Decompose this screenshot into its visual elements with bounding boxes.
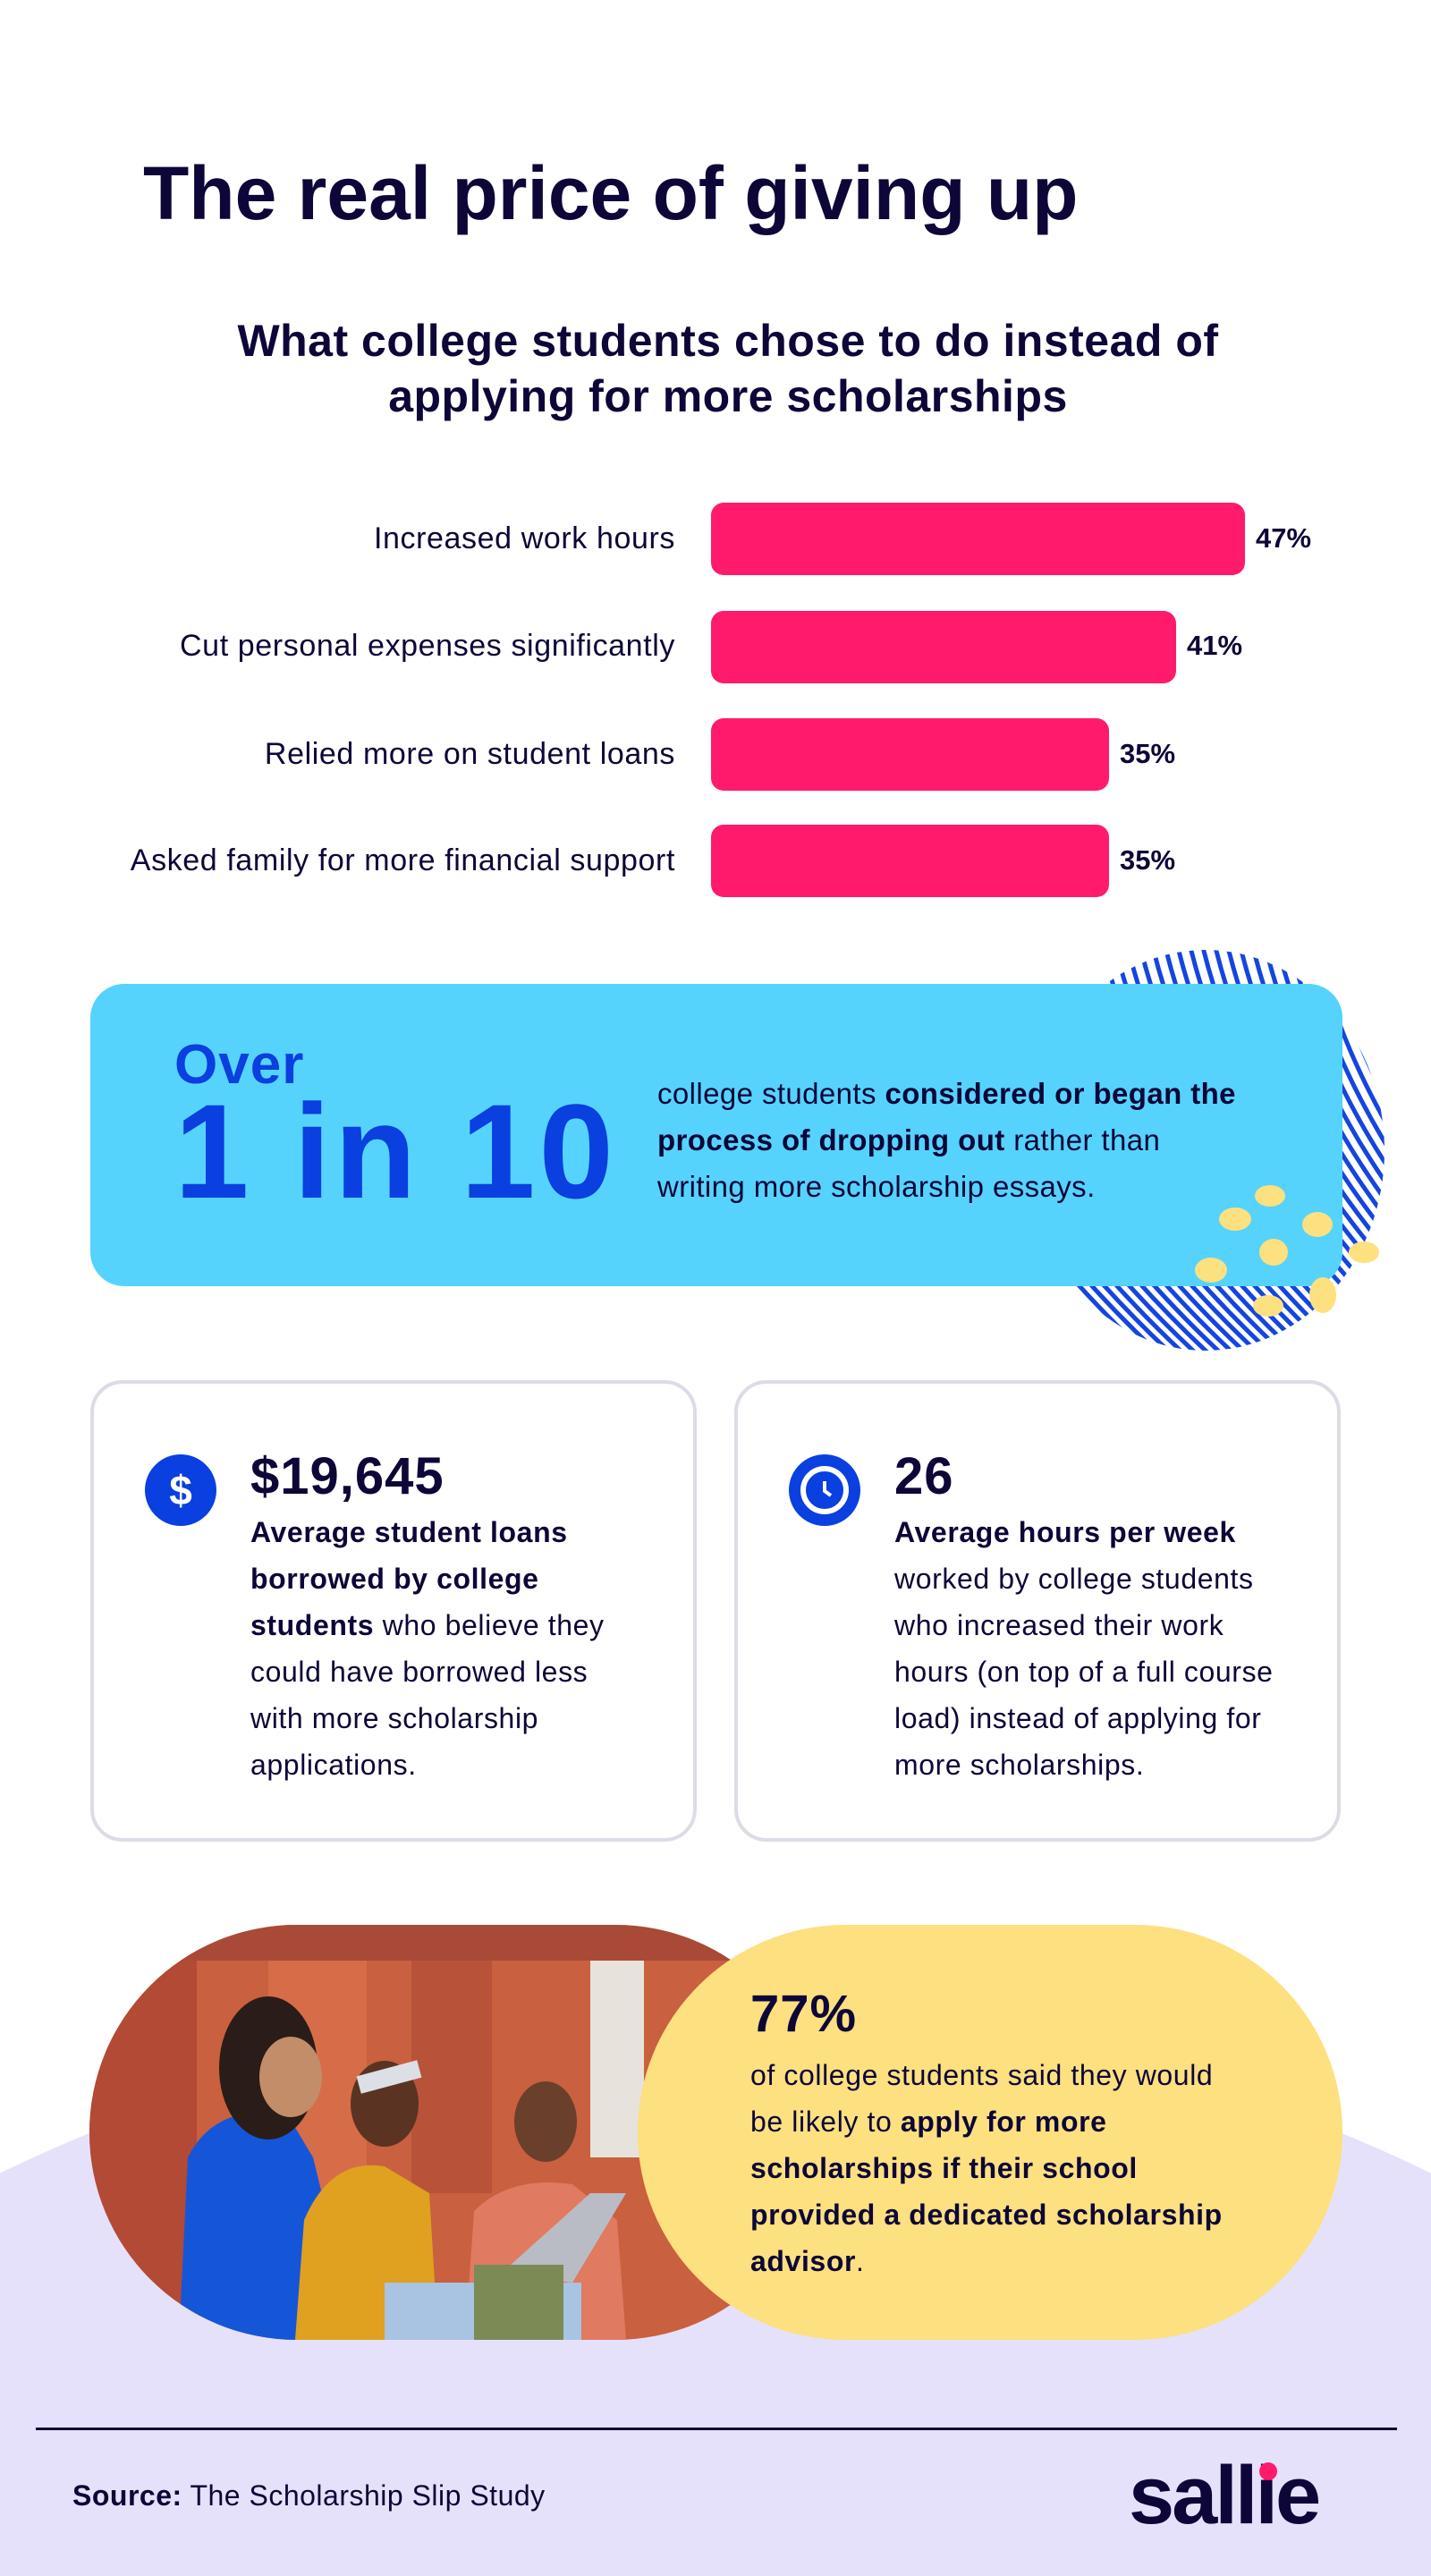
footer divider [36, 2428, 1397, 2430]
stat text: more scholarships. [894, 1749, 1144, 1781]
logo: sallie: sallie [1129, 2450, 1318, 2541]
stat text: who increased their work [894, 1609, 1224, 1641]
stat text: advisor. [750, 2245, 865, 2277]
stat text: hours (on top of a full course [894, 1656, 1274, 1688]
stat text: students who believe they [250, 1609, 605, 1641]
callout text: writing more scholarship essays. [657, 1170, 1096, 1203]
stat text: load) instead of applying for [894, 1702, 1262, 1734]
bar: family support [131, 825, 1175, 897]
callout text: process of dropping out rather than [657, 1123, 1160, 1157]
source: Source: The Scholarship Slip Study [72, 2479, 546, 2512]
card: average hours worked [734, 1380, 1341, 1842]
callout text [657, 1077, 1236, 1203]
stat text [250, 1516, 605, 1781]
stat text: borrowed by college [250, 1563, 539, 1595]
bar: increased work hours [374, 503, 1311, 575]
stat number: $19,645 [250, 1447, 445, 1505]
big stat: Over [174, 1034, 304, 1096]
stat text: with more scholarship [250, 1702, 538, 1734]
bar chart: Cut personal expenses significantly [180, 629, 675, 663]
blue sweater figure [181, 2116, 321, 2340]
stat text: Average student loans [250, 1516, 568, 1548]
bar: cut expenses [180, 611, 1242, 683]
decoration: yellow dabs [1195, 1185, 1379, 1317]
stat text: applications. [250, 1749, 417, 1781]
big stat: 1 in 10 [174, 1076, 617, 1226]
chart subtitle: applying for more scholarships [388, 371, 1068, 421]
callout: 77% scholarship advisor [638, 1925, 1342, 2340]
laptop [501, 2193, 626, 2283]
yellow sweater figure [295, 2165, 438, 2340]
salmon shirt figure [465, 2182, 626, 2340]
bar chart: Asked family for more financial support [131, 843, 675, 877]
bar chart: 35% [1120, 844, 1175, 876]
stat text: could have borrowed less [250, 1656, 588, 1688]
bar: student loans [265, 718, 1175, 791]
decoration: striped circle [1077, 950, 1384, 1351]
stat text: be likely to apply for more [750, 2106, 1107, 2138]
chart subtitle [237, 316, 1219, 421]
stat number: 26 [894, 1447, 954, 1505]
bar chart: Relied more on student loans [265, 737, 675, 771]
callout text: college students considered or began the [657, 1077, 1236, 1110]
stat text: worked by college students [894, 1563, 1254, 1595]
bar chart: 47% [1256, 522, 1311, 554]
icon: dollar [145, 1454, 216, 1526]
stat text: Average hours per week [894, 1516, 1236, 1548]
callout: 1 in 10 dropping out [90, 984, 1342, 1286]
icon: clock [789, 1454, 860, 1526]
bar chart: 35% [1120, 738, 1175, 769]
bar chart [131, 503, 1311, 897]
stat number: 77% [750, 1985, 857, 2043]
bar chart: 41% [1187, 630, 1242, 661]
chart subtitle: What college students chose to do instead of [237, 316, 1219, 366]
card: average student loans [90, 1380, 697, 1842]
icon: dollar: $ [169, 1467, 192, 1513]
stat text [894, 1516, 1274, 1781]
stat text: scholarships if their school [750, 2152, 1138, 2184]
title: The real price of giving up [143, 151, 1079, 235]
stat text: of college students said they would [750, 2059, 1213, 2091]
stat text: provided a dedicated scholarship [750, 2199, 1223, 2231]
stat text [750, 2059, 1223, 2277]
bar chart: Increased work hours [374, 521, 675, 555]
photo: students with laptop [89, 1925, 730, 2340]
